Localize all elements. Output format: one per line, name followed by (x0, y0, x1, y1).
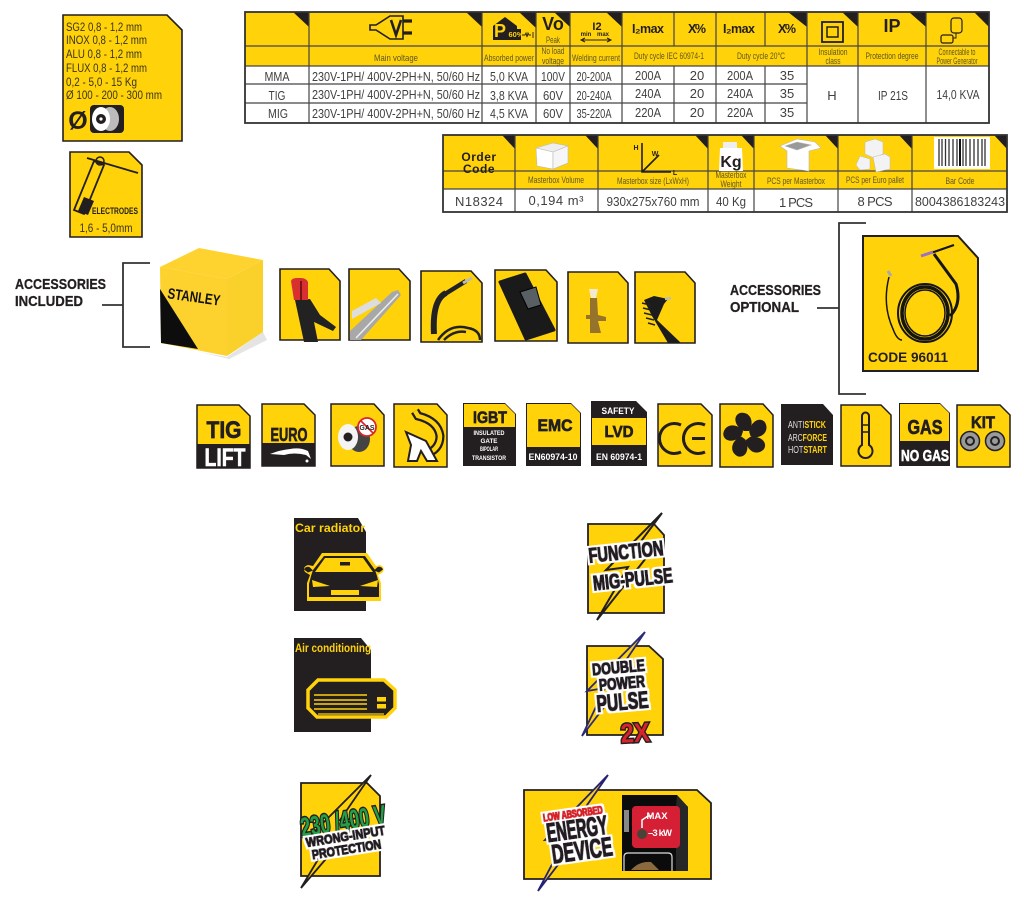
icon: voltage plug (370, 16, 412, 39)
table sub-header labels: Protection degree (866, 51, 918, 62)
table row: MMA: 100V (541, 69, 565, 84)
wire spec text: INOX 0,8 - 1,2 mm (66, 35, 147, 47)
table row: MIG: 230V-1PH/ 400V-2PH+N, 50/60 Hz (312, 106, 480, 121)
packaging values: 0,194 m³ (528, 193, 584, 208)
table row: MIG: 35 (780, 105, 794, 120)
badge: double power pulse (582, 632, 663, 749)
table row: TIG: 240A (727, 86, 753, 101)
table sub-header labels: Duty cycle 20°C (737, 51, 785, 62)
IGBT description: INSULATED (474, 430, 505, 437)
packaging labels: Masterbox Volume (528, 175, 584, 186)
icon: masterbox axes: L (673, 170, 678, 177)
table row: TIG: 240A (635, 86, 661, 101)
table sub-header labels: Connectable to (938, 47, 976, 58)
badge: function MIG-pulse (588, 513, 674, 620)
2X label: 2X (620, 717, 650, 749)
packaging labels: Bar Code (946, 176, 974, 187)
icon: welding current range (581, 21, 611, 42)
badge: EMC (526, 403, 581, 466)
table sub-header labels: voltage (542, 56, 564, 67)
table sub-header labels: Duty cycle IEC 60974-1 (634, 51, 704, 62)
table row: MIG: 20 (690, 105, 704, 120)
double power pulse label (591, 656, 650, 718)
table row: MMA: 35 (780, 68, 794, 83)
merged values: IP 21S (878, 88, 908, 103)
icon: electrode holder (74, 157, 138, 215)
double power pulse label: PULSE (595, 687, 650, 718)
badge: EURO connector: EURO (270, 425, 308, 445)
badge: EURO connector (262, 404, 315, 466)
table sub-header labels: class (826, 56, 841, 67)
energy device label: DEVICE (550, 831, 614, 870)
wire spec text (66, 22, 162, 102)
table row: MIG (268, 105, 794, 121)
accessory: torch tip (568, 272, 628, 343)
heading: accessories included: INCLUDED (15, 294, 83, 310)
panel: electrodes (70, 152, 142, 237)
heading: order code: Order (461, 150, 497, 164)
icon: diameter: Ø (68, 107, 88, 135)
table row: MMA: MMA (264, 69, 290, 84)
badge: gasless spool (331, 404, 384, 466)
table sub-header labels: Insulation (818, 47, 848, 58)
double power pulse label: POWER (598, 672, 646, 695)
icon: welding current range: I2 (592, 21, 602, 33)
bracket: accessories optional (817, 223, 866, 394)
wrong input protection label: WRONG-INPUT (305, 823, 386, 850)
badge: TIG LIFT (197, 405, 250, 472)
table header labels: X% (688, 22, 706, 36)
table row: TIG: 35 (780, 86, 794, 101)
badge: wheel kit: KIT (971, 413, 996, 432)
packaging values: 8 PCS (858, 194, 893, 209)
heading: no load voltage: Peak (546, 35, 560, 46)
IGBT description: BIPOLAR (480, 446, 498, 453)
icon: air conditioner (308, 680, 395, 717)
packaging labels: Weight (720, 179, 742, 190)
photo: control panel (622, 795, 688, 871)
badge: safety LVD: EN 60974-1 (596, 452, 643, 463)
table row: MMA: 20-200A (576, 69, 612, 84)
table row: MMA (264, 68, 794, 84)
icon: absorbed power (493, 17, 533, 41)
packaging values: 930x275x760 mm (606, 194, 700, 209)
function MIG-pulse label: MIG-PULSE (592, 564, 674, 595)
product box: Stanley cube (160, 248, 267, 359)
badge: EMC: EMC (538, 416, 572, 435)
badge: wheel kit (957, 405, 1010, 467)
heading: no load voltage (542, 14, 564, 46)
panel: order and packaging table (443, 135, 1007, 212)
badge: IGBT (463, 403, 516, 466)
heading: accessories optional (730, 283, 821, 316)
wire spec text: Ø 100 - 200 - 300 mm (66, 90, 162, 102)
icon: open box (780, 139, 821, 171)
icon: masterbox axes (633, 143, 678, 177)
table row: TIG: 230V-1PH/ 400V-2PH+N, 50/60 Hz (312, 87, 480, 102)
table sub-header labels: Absorbed power (484, 53, 534, 64)
panel: wire specifications (63, 15, 182, 141)
icon: masterbox axes: W (652, 151, 659, 158)
voltage label: 230 /400 V (298, 800, 388, 843)
car radiator label: Car radiator (295, 523, 366, 535)
table header labels: IP (883, 16, 901, 36)
energy device label: LOW ABSORBED (542, 804, 604, 825)
table sub-header labels: Main voltage (374, 53, 418, 64)
badge: safety LVD: LVD (604, 424, 634, 441)
wire spec text: FLUX 0,8 - 1,2 mm (66, 63, 147, 75)
badge: EMC: EN60974-10 (528, 452, 578, 463)
accessory: chipping brush (635, 272, 695, 343)
icon: boxes on pallet (856, 139, 890, 172)
icon: lightning bolt (597, 513, 662, 620)
icon: lightning bolt (582, 632, 645, 736)
packaging labels: Masterbox size (LxWxH) (617, 176, 689, 187)
badge: IGBT: IGBT (473, 409, 507, 427)
table row: MIG: 60V (543, 106, 563, 121)
badge: gasless spool: GAS (359, 425, 375, 432)
badge: antistick arcforce hotstart: ARCFORCE (788, 432, 827, 444)
table row: TIG (268, 86, 794, 103)
icon: wire spool (90, 105, 124, 133)
function MIG-pulse label (588, 536, 674, 596)
air conditioning label: Air conditioning (295, 643, 371, 655)
heading: accessories included (15, 277, 106, 310)
energy device label: ENERGY (545, 810, 609, 848)
heading: accessories optional: ACCESSORIES (730, 283, 821, 299)
table sub-header labels (374, 46, 978, 67)
wire spec text: ALU 0,8 - 1,2 mm (66, 49, 142, 61)
IGBT description: GATE (480, 438, 498, 445)
packaging labels: Masterbox (716, 170, 747, 181)
packaging values: 8004386183243 (915, 194, 1005, 209)
energy device label (542, 804, 614, 870)
packaging values: 1 PCS (779, 195, 813, 210)
table row: MMA: 20 (690, 68, 704, 83)
table header labels: I₂max (632, 22, 664, 36)
function MIG-pulse label: FUNCTION (588, 537, 664, 568)
Stanley logo: STANLEY (167, 285, 221, 310)
icon: absorbed power: 60% (508, 30, 524, 39)
badge: flexible hose (394, 404, 447, 467)
table header labels: I₂max (723, 22, 755, 36)
badge: antistick arcforce hotstart (781, 404, 833, 465)
IGBT description: TRANSISTOR (472, 455, 506, 462)
icon: lightning bolt (538, 775, 608, 891)
table sub-header labels: Welding current (572, 53, 620, 64)
badge: gas no gas: GAS (908, 417, 942, 439)
table row: MIG: 220A (635, 105, 661, 120)
bracket: accessories included (102, 263, 150, 347)
badge: air conditioning (294, 638, 395, 732)
badge: antistick arcforce hotstart: ANTISTICK (788, 419, 826, 431)
accessory: TIG torch code 96011 (863, 236, 978, 371)
photo: control panel: MAX (646, 811, 668, 822)
badge: low absorbed energy device (524, 775, 711, 891)
icon: lightning bolt (301, 775, 371, 888)
icon: weight: Kg (720, 154, 742, 171)
badge: car radiator (294, 518, 384, 611)
double power pulse label: DOUBLE (591, 656, 646, 679)
wire spec text: 0,2 - 5,0 - 15 Kg (66, 77, 137, 89)
accessory: MIG torch (421, 271, 482, 342)
photo: control panel: –3 kW (648, 828, 672, 839)
packaging labels (528, 170, 974, 190)
heading: no load voltage: Vo (542, 14, 564, 34)
wrong input protection label: PROTECTION (311, 837, 382, 862)
table row: MMA: 200A (727, 68, 753, 83)
badge: antistick arcforce hotstart: HOTSTART (788, 444, 827, 456)
badge: TIG LIFT: TIG (206, 417, 242, 444)
wire spec text: SG2 0,8 - 1,2 mm (66, 22, 142, 34)
icon: masterbox axes: H (633, 145, 639, 152)
table row: TIG: 20-240A (576, 88, 612, 103)
merged values (827, 87, 980, 103)
badge: TIG LIFT: LIFT (204, 444, 246, 472)
merged values: H (827, 88, 837, 103)
badge: cooling fan (720, 404, 773, 467)
packaging labels: PCS per Masterbox (767, 176, 825, 187)
table row: MMA: 5,0 KVA (490, 69, 528, 84)
packaging values (455, 193, 1005, 210)
heading: accessories optional: OPTIONAL (730, 300, 799, 316)
panel: welding specification table (245, 12, 989, 123)
heading: order code: Code (463, 162, 495, 176)
table row: MIG: MIG (268, 106, 288, 121)
table row: TIG: TIG (268, 88, 286, 103)
wrong input protection label (305, 823, 388, 863)
packaging values: 40 Kg (716, 194, 746, 209)
table row: MMA: 200A (635, 68, 661, 83)
icon: masterbox cube (536, 143, 568, 169)
table row: MIG: 4,5 KVA (490, 106, 528, 121)
badge: safety LVD (591, 401, 647, 466)
icon: barcode (934, 137, 990, 169)
badge: safety LVD: SAFETY (602, 406, 635, 417)
badge: gas no gas (899, 403, 950, 466)
table header labels: X% (778, 22, 796, 36)
table sub-header labels: No load (542, 46, 564, 57)
merged values: 14,0 KVA (936, 87, 980, 102)
icon: TIG torch and cable (886, 245, 958, 342)
badge: thermal protection (841, 405, 891, 466)
table row: TIG: 20 (690, 86, 704, 101)
electrode diameter: 1,6 - 5,0mm (80, 223, 132, 235)
badge: 230/400V wrong input protection (298, 775, 388, 888)
table row: TIG: 3,8 KVA (490, 88, 528, 103)
table row: MIG: 220A (727, 105, 753, 120)
icon: car (304, 553, 384, 601)
accessory: welding mask (495, 270, 557, 341)
packaging values: N18324 (455, 194, 503, 209)
table row: MIG: 35-220A (576, 106, 612, 121)
packaging labels: PCS per Euro pallet (846, 175, 904, 186)
table header labels (632, 16, 962, 43)
icon: weight (719, 142, 743, 171)
icon: absorbed power: P (494, 21, 506, 41)
icon: welding current range: max (597, 32, 610, 38)
heading: accessories included: ACCESSORIES (15, 277, 106, 293)
table row: MMA: 230V-1PH/ 400V-2PH+N, 50/60 Hz (312, 69, 480, 84)
badge: gas no gas: NO GAS (901, 448, 949, 465)
table row: TIG: 60V (543, 88, 563, 103)
electrodes label: ELECTRODES (92, 206, 138, 217)
IGBT description (472, 430, 506, 462)
accessory: earth clamp (280, 269, 340, 342)
heading: order code (461, 150, 497, 176)
table sub-header labels: Power Generator (936, 56, 978, 67)
icon: welding current range: min (581, 32, 592, 38)
accessory: electrode holder (349, 269, 410, 340)
badge: CE mark (658, 404, 712, 466)
optional accessory code: CODE 96011 (868, 349, 948, 365)
